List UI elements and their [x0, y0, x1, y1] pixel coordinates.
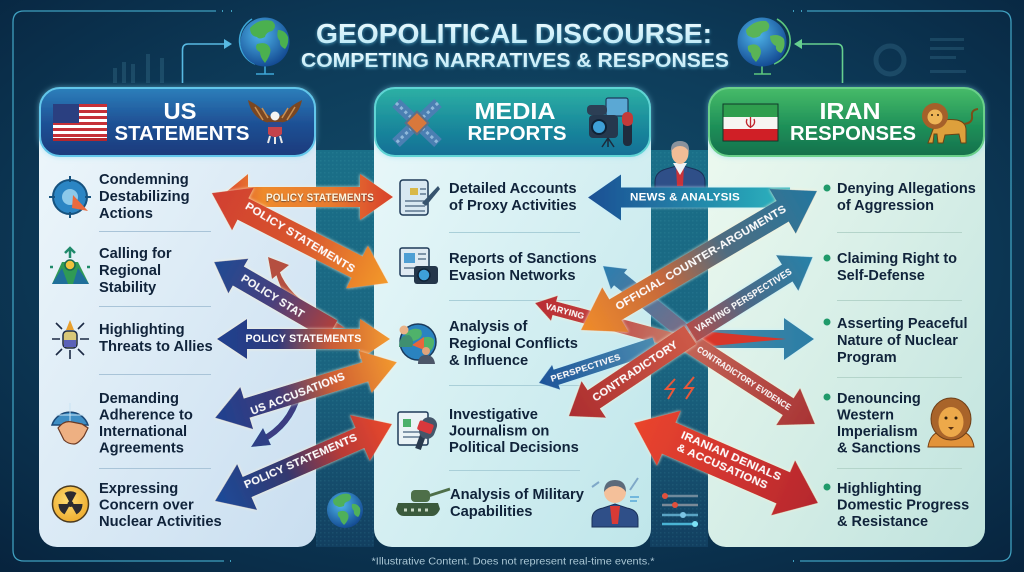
arrow: Iranian denials and accusations — [622, 395, 830, 531]
curved arrow: small blue — [251, 395, 298, 447]
arrow: contradictory evidence — [673, 321, 827, 443]
item: Claiming: Claiming Right to — [837, 251, 957, 267]
item: Denouncing: Western — [837, 408, 894, 424]
arrow: perspectives — [535, 333, 659, 395]
title line 2: COMPETING NARRATIVES & RESPONSES — [301, 49, 729, 72]
item: Expressing: Expressing — [99, 481, 178, 497]
arrow: US accusations — [209, 341, 403, 439]
heading: STATEMENTS: STATEMENTS — [114, 123, 250, 145]
item: Highlighting Domestic: Domestic Progress — [837, 498, 969, 514]
arrow: news and analysis — [588, 174, 790, 220]
icon: gold lion — [922, 103, 978, 143]
label: news and analysis: NEWS & ANALYSIS — [630, 192, 740, 204]
panel: US statements — [39, 88, 316, 547]
arrow: varying perspectives — [680, 239, 824, 351]
panel header — [709, 88, 984, 156]
arrow: policy statements lower — [205, 401, 402, 524]
icon: Iran flag — [723, 104, 778, 141]
item: Asserting: Nature of Nuclear — [837, 333, 958, 349]
icon: satellite — [396, 103, 438, 143]
item: Asserting: Program — [837, 350, 897, 366]
item: Analysis of Regional: Analysis of — [449, 319, 527, 335]
item: Denouncing: Imperialism — [837, 424, 918, 440]
background gap: left — [316, 150, 374, 547]
arrow: blue to sanctions — [595, 256, 696, 345]
panel header — [375, 88, 650, 156]
item: Expressing: Concern over — [99, 498, 194, 514]
item: Denouncing: Denouncing — [837, 391, 921, 407]
label: policy stat: POLICY STAT — [239, 273, 306, 321]
item: Analysis of Military: Capabilities — [450, 504, 532, 520]
icon: lightning — [666, 377, 694, 399]
item: Condemning: Actions — [99, 206, 153, 222]
icon: handshake globe — [52, 403, 88, 444]
icon: eagle — [248, 100, 302, 144]
label: official counter-arguments: OFFICIAL COUNTER-ARGUMENTS — [614, 203, 789, 313]
icon: news and camera — [400, 248, 438, 284]
icon: left globe — [240, 18, 290, 74]
bullets — [824, 184, 830, 490]
item: Investigative: Political Decisions — [449, 440, 579, 456]
icon: analyst — [592, 478, 639, 527]
icon: tank — [396, 489, 450, 516]
arrow: varying red — [532, 291, 683, 354]
item: Detailed Accounts: Detailed Accounts — [449, 181, 577, 197]
label: Iranian denials: IRANIAN DENIALS — [679, 429, 783, 483]
red streak — [700, 331, 786, 347]
label: contradictory evidence: CONTRADICTORY EVIDENCE — [695, 344, 793, 412]
arrowhead: left — [224, 39, 232, 49]
icon: video camera — [587, 98, 633, 147]
item: Analysis of Regional: Regional Conflicts — [449, 336, 578, 352]
arrowhead: right — [794, 39, 802, 49]
item: Demanding: Demanding — [99, 391, 179, 407]
label: perspectives: PERSPECTIVES — [549, 352, 622, 384]
arrow: asserting peaceful — [695, 318, 814, 360]
heading: RESPONSES: RESPONSES — [790, 123, 916, 145]
icon: right globe — [738, 18, 790, 74]
item: Investigative: Investigative — [449, 407, 538, 423]
item: Analysis of Regional: & Influence — [449, 353, 528, 369]
item: Highlighting Domestic: & Resistance — [837, 514, 928, 530]
heading: MEDIA: MEDIA — [474, 98, 556, 124]
item: Highlighting Domestic: Highlighting — [837, 481, 922, 497]
heading: US: US — [164, 98, 196, 124]
panel: media reports — [374, 88, 651, 547]
title — [301, 18, 729, 72]
item: Condemning: Condemning — [99, 172, 189, 188]
item: Condemning: Destabilizing — [99, 189, 190, 205]
icon: microphone and document — [398, 412, 439, 449]
label: US accusations: US ACCUSATIONS — [249, 371, 347, 418]
background gap: right — [650, 150, 708, 547]
heading: IRAN: IRAN — [820, 98, 880, 124]
item: Demanding: International — [99, 424, 187, 440]
item: Calling: Stability — [99, 280, 157, 296]
faint background chart — [113, 38, 966, 83]
arrow: policy statements top horizontal — [220, 174, 393, 220]
item: Denouncing: & Sanctions — [837, 440, 921, 456]
arrow: policy stat diagonal — [204, 245, 342, 347]
icon: lion head — [928, 398, 974, 447]
icon: document and pen — [400, 180, 440, 215]
item: Highlighting: Highlighting — [99, 322, 185, 338]
item: Denying: Denying Allegations — [837, 181, 976, 197]
icon: sliders — [662, 493, 698, 527]
item: Reports of Sanctions: Reports of Sanctions — [449, 251, 597, 267]
panel body — [39, 92, 316, 547]
connector arrow: right — [798, 44, 842, 83]
label: varying: VARYING — [544, 301, 586, 321]
person behind news arrow — [655, 141, 705, 190]
item: Claiming: Self-Defense — [837, 268, 925, 284]
label: contradictory: CONTRADICTORY — [590, 339, 681, 404]
heading: REPORTS: REPORTS — [468, 123, 566, 145]
label: policy statements middle: POLICY STATEMENTS — [246, 333, 362, 345]
item: Investigative: Journalism on — [449, 424, 549, 440]
title line 1: GEOPOLITICAL DISCOURSE: — [316, 18, 712, 49]
icon: threats to allies — [52, 320, 89, 359]
icon: regional map — [50, 248, 90, 284]
item: Asserting: Asserting Peaceful — [837, 316, 968, 332]
panel: Iran responses — [708, 88, 985, 547]
arrow body — [695, 318, 814, 360]
item: Demanding: Adherence to — [99, 408, 193, 424]
item: Calling: Calling for — [99, 246, 172, 262]
item: Denying: of Aggression — [837, 198, 934, 214]
label: policy statements lower: POLICY STATEMENTS — [243, 432, 359, 491]
arrow: official counter-arguments — [568, 169, 830, 352]
icon: regional analysis globe — [399, 324, 436, 364]
item: Expressing: Nuclear Activities — [99, 514, 222, 530]
icon: US flag — [53, 104, 107, 141]
item: Calling: Regional — [99, 263, 161, 279]
icon: nuclear — [52, 486, 88, 522]
item: Detailed Accounts: of Proxy Activities — [449, 198, 577, 214]
panel header — [40, 88, 315, 156]
label: and accusations: & ACCUSATIONS — [675, 442, 770, 492]
arrow: policy statements middle — [217, 319, 390, 359]
arrow: policy statements diagonal — [201, 172, 399, 304]
connector arrow: left — [182, 44, 228, 83]
icon: target — [49, 176, 91, 218]
item: Demanding: Agreements — [99, 440, 184, 456]
small globe — [327, 492, 363, 528]
item: Reports of Sanctions: Evasion Networks — [449, 268, 576, 284]
label: varying perspectives: VARYING PERSPECTIVES — [693, 266, 794, 334]
arrow: contradictory — [557, 317, 702, 434]
footnote: *Illustrative Content. Does not represent real-time events.* — [372, 556, 654, 568]
curved arrow: small red — [268, 257, 345, 328]
label: policy statements diagonal: POLICY STATEMENTS — [243, 200, 357, 276]
item: Analysis of Military: Analysis of Military — [450, 487, 584, 503]
panel body — [374, 92, 651, 547]
label: policy statements: POLICY STATEMENTS — [266, 192, 374, 204]
item: Highlighting: Threats to Allies — [99, 339, 213, 355]
panel body — [708, 92, 985, 547]
